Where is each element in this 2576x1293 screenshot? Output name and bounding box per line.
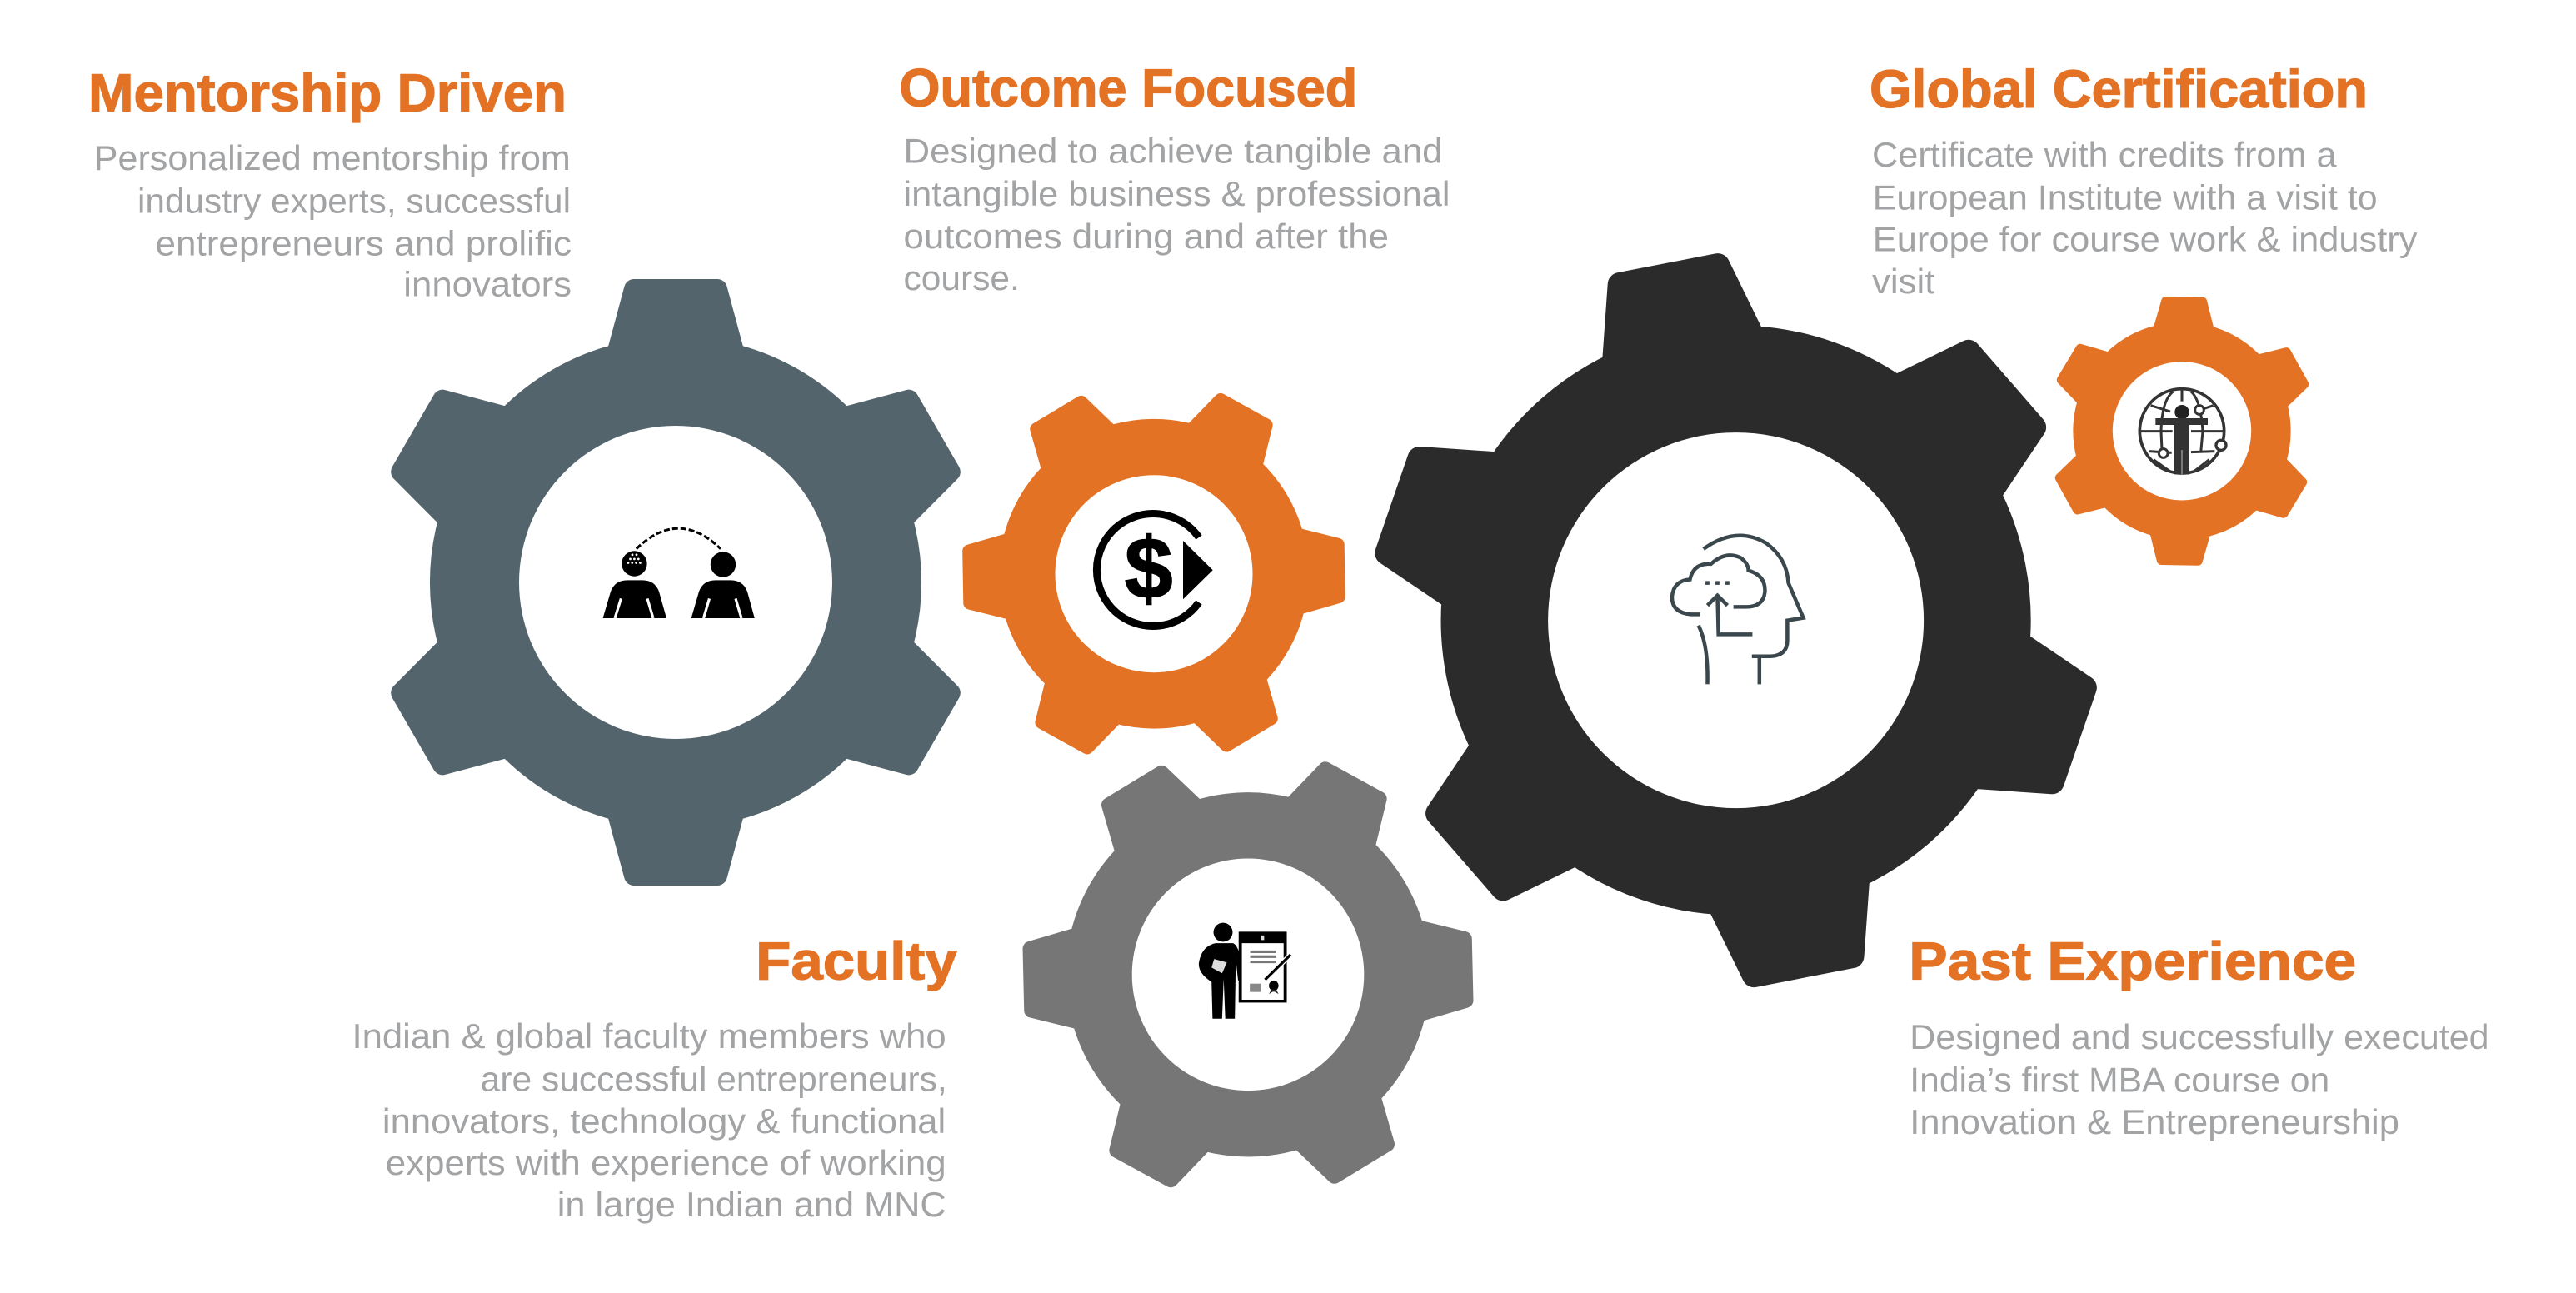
description: Designed to achieve tangible and	[903, 132, 1443, 170]
description	[352, 1016, 947, 1224]
description: intangible business & professional	[903, 174, 1450, 213]
icon: dollar return	[1096, 513, 1213, 627]
panel: faculty gear	[965, 686, 1531, 1263]
description: Certificate with credits from a	[1872, 135, 2337, 174]
heading: Faculty	[756, 931, 957, 991]
description: outcomes during and after the	[903, 217, 1389, 256]
gear body: slate	[401, 289, 951, 876]
description: Designed and successfully executed	[1910, 1017, 2489, 1056]
icon: dollar return: $	[1125, 521, 1173, 617]
panel: mentorship gear	[401, 289, 951, 876]
description: course.	[903, 258, 1020, 297]
icon: teacher with board	[1199, 923, 1290, 1019]
description	[94, 138, 572, 304]
heading: Outcome Focused	[900, 58, 1357, 118]
gear body: orange	[913, 328, 1395, 819]
description: Indian & global faculty members who	[352, 1016, 946, 1056]
description	[1872, 135, 2417, 301]
gear hole	[519, 426, 832, 739]
gear hole	[1055, 475, 1253, 672]
text block: Mentorship Driven	[88, 62, 572, 304]
icon: person and globe	[2139, 389, 2226, 474]
description: experts with experience of working	[386, 1143, 946, 1182]
description: Europe for course work & industry	[1873, 220, 2417, 258]
gear body: charcoal	[1345, 212, 2127, 1029]
gear body: gray	[965, 686, 1531, 1263]
gear hole	[2113, 362, 2251, 500]
text block: Global Certification	[1870, 59, 2417, 301]
panel: global certification gear	[2058, 299, 2306, 563]
description: innovators	[403, 265, 572, 304]
description: entrepreneurs and prolific	[155, 224, 572, 263]
panel: past experience gear	[1345, 212, 2127, 1029]
description: industry experts, successful	[137, 182, 571, 221]
heading: Past Experience	[1909, 931, 2356, 991]
description: visit	[1872, 262, 1935, 301]
description: Personalized mentorship from	[94, 138, 571, 177]
description: innovators, technology & functional	[382, 1101, 946, 1141]
description	[903, 132, 1450, 297]
description: European Institute with a visit to	[1873, 178, 2378, 217]
description: are successful entrepreneurs,	[481, 1060, 947, 1098]
text block: Outcome Focused	[900, 58, 1450, 297]
icon: mentor and mentee	[603, 528, 755, 618]
text block: Past Experience	[1909, 931, 2489, 1141]
description: in large Indian and MNC	[557, 1185, 946, 1224]
text block: Faculty	[352, 931, 957, 1224]
gear hole	[1548, 432, 1924, 808]
gear body: orange small	[2058, 299, 2306, 563]
icon: head with cloud	[1672, 536, 1804, 684]
heading: Global Certification	[1870, 59, 2368, 119]
gear hole	[1132, 858, 1364, 1091]
description	[1910, 1017, 2489, 1141]
heading: Mentorship Driven	[88, 62, 567, 122]
panel: outcome gear	[913, 328, 1395, 819]
description: Innovation & Entrepreneurship	[1910, 1102, 2399, 1141]
description: India’s first MBA course on	[1910, 1060, 2329, 1100]
